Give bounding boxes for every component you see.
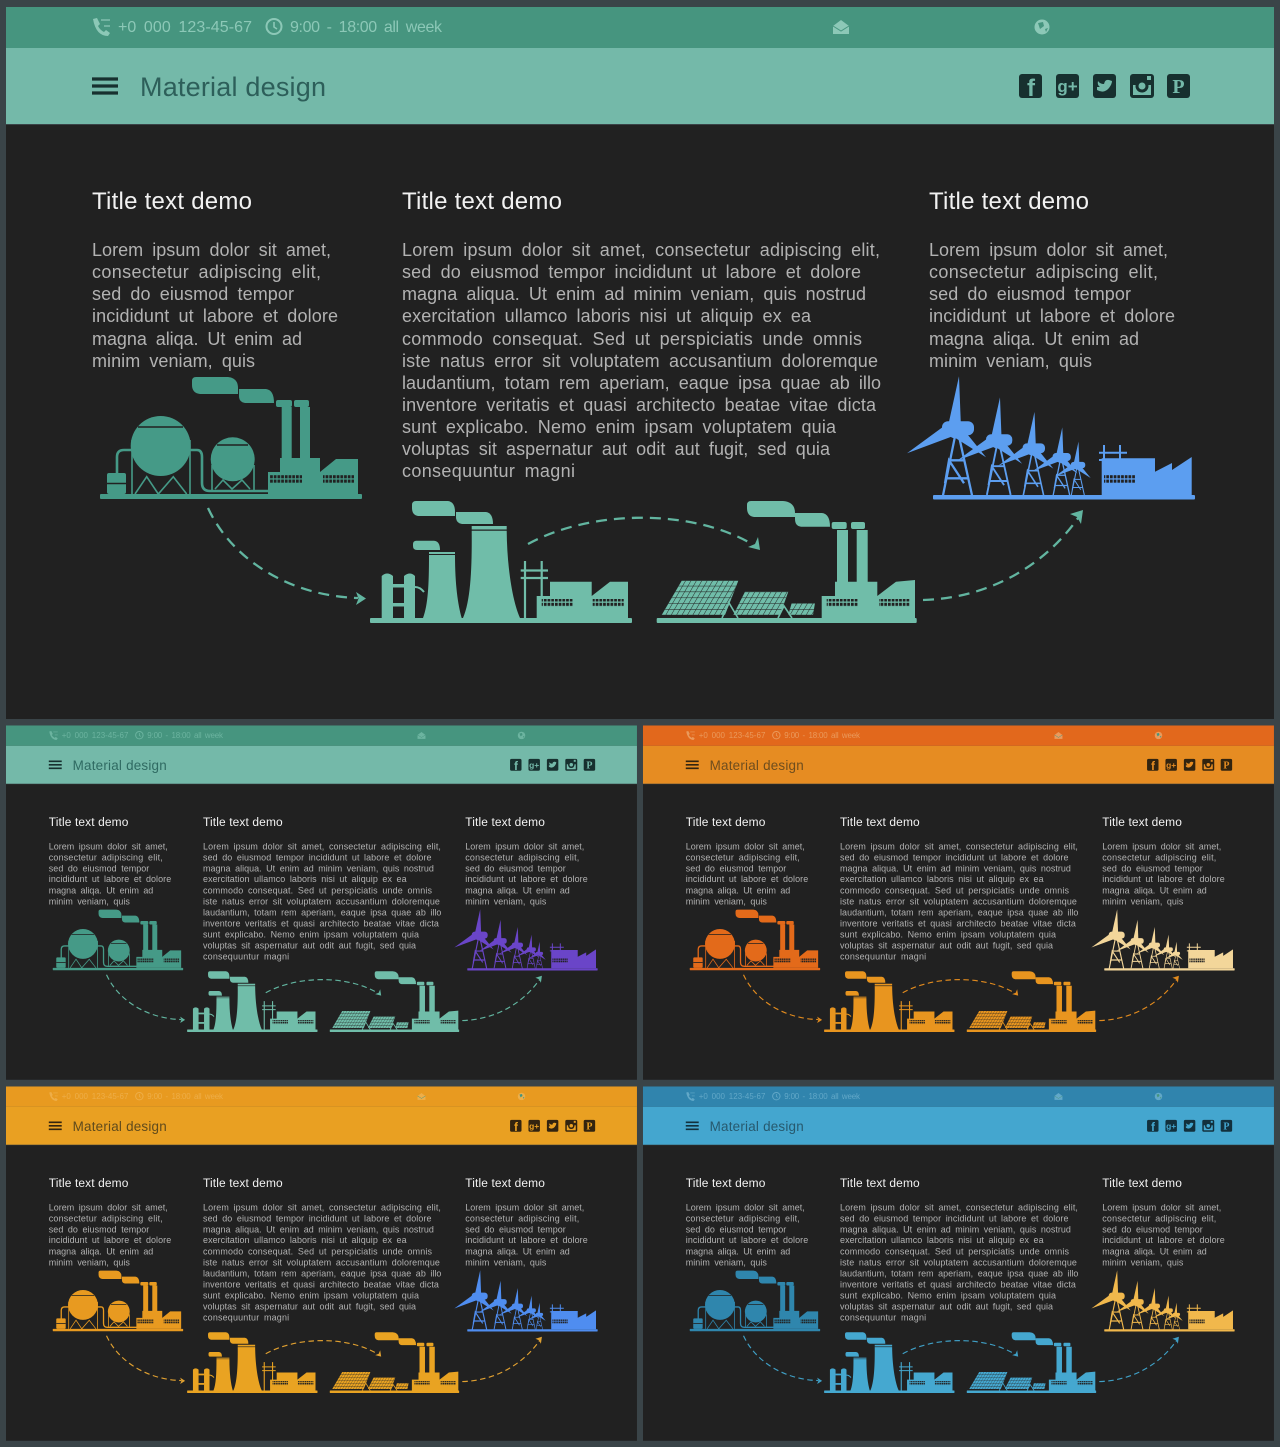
left text block: minim veniam, quis xyxy=(49,1258,130,1268)
right text block xyxy=(1102,1176,1225,1268)
right text block: consectetur adipiscing elit, xyxy=(465,852,579,862)
right text block xyxy=(465,815,588,907)
left text block: Title text demo xyxy=(49,815,129,829)
center text block: sunt explicabo. Nemo enim ipsam voluptatem quia xyxy=(840,929,1056,939)
center text block: consequuntur magni xyxy=(840,1312,926,1322)
left text block: Title text demo xyxy=(49,1176,129,1190)
left text block: sed do eiusmod tempor xyxy=(49,1224,149,1234)
center text block: sed do eiusmod tempor incididunt ut labore et dolore xyxy=(840,852,1068,862)
social icons: g+ xyxy=(1166,1121,1176,1131)
top contact bar: 9:00 - 18:00 all week xyxy=(147,731,223,740)
right text block: Lorem ipsum dolor sit amet, xyxy=(1102,841,1221,851)
social icons: f xyxy=(514,1120,518,1134)
right text block: incididunt ut labore et dolore xyxy=(1102,874,1225,884)
center text block: inventore veritatis et quasi architecto beatae vitae dicta xyxy=(203,1280,439,1290)
center text block: magna aliqua. Ut enim ad minim veniam, quis nostrud xyxy=(840,1224,1071,1234)
panel: amber variant xyxy=(6,1086,637,1441)
right text block: magna aliqa. Ut enim ad xyxy=(465,1247,570,1257)
main panel dark body xyxy=(6,125,1274,719)
center text block: commodo consequat. Sed ut perspiciatis unde omnis xyxy=(203,886,432,896)
center text block: commodo consequat. Sed ut perspiciatis unde omnis xyxy=(402,329,862,349)
social icons: P xyxy=(1223,1121,1229,1132)
top contact bar xyxy=(6,7,1274,48)
illustration: solar plant xyxy=(330,971,459,1032)
social icons: f xyxy=(1151,759,1155,773)
left text block: Title text demo xyxy=(686,815,766,829)
illustration: gas refinery xyxy=(690,910,820,970)
center text block: voluptas sit aspernatur aut odit aut fugit, sed quia xyxy=(203,940,416,950)
illustration: wind farm xyxy=(454,909,598,971)
center text block: commodo consequat. Sed ut perspiciatis unde omnis xyxy=(203,1247,432,1257)
left text block: consectetur adipiscing elit, xyxy=(49,852,163,862)
right text block: Lorem ipsum dolor sit amet, xyxy=(1102,1202,1221,1212)
right text block: magna aliqa. Ut enim ad xyxy=(1102,1247,1207,1257)
right text block: Title text demo xyxy=(1102,815,1182,829)
icon: globe xyxy=(1034,20,1050,34)
panel body xyxy=(643,784,1274,1080)
left text block: consectetur adipiscing elit, xyxy=(49,1213,163,1223)
panel: teal variant xyxy=(6,725,637,1080)
icon: hamburger menu xyxy=(92,79,118,93)
center text block: inventore veritatis et quasi architecto beatae vitae dicta xyxy=(203,919,439,929)
navigation bar xyxy=(643,746,1274,784)
center text block: iste natus error sit voluptatem accusantium doloremque xyxy=(402,351,878,371)
right text block: incididunt ut labore et dolore xyxy=(465,874,588,884)
right text block: minim veniam, quis xyxy=(1102,897,1184,907)
center text block: Title text demo xyxy=(840,815,920,829)
right text block: Title text demo xyxy=(929,188,1089,215)
top contact bar: 9:00 - 18:00 all week xyxy=(147,1092,223,1101)
social icons xyxy=(510,1120,595,1134)
center text block: voluptas sit aspernatur aut odit aut fugit, sed quia xyxy=(402,439,831,459)
center text block: sed do eiusmod tempor incididunt ut labore et dolore xyxy=(203,852,431,862)
social icons: g+ xyxy=(529,1121,539,1131)
illustration: wind farm xyxy=(1091,909,1235,971)
left text block: sed do eiusmod tempor xyxy=(686,863,786,873)
illustration: gas refinery xyxy=(53,1271,183,1331)
center text block: iste natus error sit voluptatem accusantium doloremque xyxy=(203,897,440,907)
right text block: minim veniam, quis xyxy=(465,897,547,907)
center text block xyxy=(840,815,1078,961)
center text block: iste natus error sit voluptatem accusantium doloremque xyxy=(840,1258,1077,1268)
left text block: Lorem ipsum dolor sit amet, xyxy=(686,1202,805,1212)
right text block: minim veniam, quis xyxy=(465,1258,547,1268)
left text block: magna aliqa. Ut enim ad xyxy=(49,1247,153,1257)
top contact bar: +0 000 123-45-67 xyxy=(62,731,129,740)
left text block: Title text demo xyxy=(92,188,252,215)
center text block: sunt explicabo. Nemo enim ipsam voluptatem quia xyxy=(203,929,419,939)
left text block xyxy=(49,1176,171,1268)
right text block: incididunt ut labore et dolore xyxy=(1102,1235,1225,1245)
center text block: laudantium, totam rem aperiam, eaque ipsa quae ab illo xyxy=(402,373,881,393)
center text block: iste natus error sit voluptatem accusantium doloremque xyxy=(203,1258,440,1268)
dashed flow arrows xyxy=(107,975,542,1023)
dashed flow arrows xyxy=(744,1336,1179,1384)
center text block: commodo consequat. Sed ut perspiciatis unde omnis xyxy=(840,886,1069,896)
center text block xyxy=(203,1176,441,1322)
illustration: gas refinery xyxy=(53,910,183,970)
right text block: minim veniam, quis xyxy=(929,351,1092,371)
right text block: sed do eiusmod tempor xyxy=(465,1224,566,1234)
center text block: sed do eiusmod tempor incididunt ut labore et dolore xyxy=(402,262,861,282)
illustration: solar plant xyxy=(657,501,917,623)
right text block: consectetur adipiscing elit, xyxy=(465,1213,579,1223)
left text block: Lorem ipsum dolor sit amet, xyxy=(49,1202,168,1212)
navigation bar xyxy=(6,1107,637,1145)
left text block: sed do eiusmod tempor xyxy=(686,1224,786,1234)
dashed flow arrows xyxy=(744,975,1179,1023)
top contact bar xyxy=(6,1086,637,1107)
left text block: magna aliqa. Ut enim ad xyxy=(686,1247,790,1257)
navigation bar xyxy=(6,48,1274,124)
left text block: incididunt ut labore et dolore xyxy=(686,874,808,884)
top contact bar: 9:00 - 18:00 all week xyxy=(784,1092,860,1101)
left text block: minim veniam, quis xyxy=(686,897,767,907)
center text block: voluptas sit aspernatur aut odit aut fugit, sed quia xyxy=(203,1301,416,1311)
left text block: Lorem ipsum dolor sit amet, xyxy=(49,841,168,851)
right text block: Title text demo xyxy=(465,1176,545,1190)
left text block: consectetur adipiscing elit, xyxy=(686,1213,800,1223)
illustration: cooling tower plant xyxy=(824,1332,954,1393)
center text block xyxy=(402,188,881,481)
illustration: cooling tower plant xyxy=(370,501,632,623)
illustration: wind farm xyxy=(907,376,1195,500)
top contact bar: +0 000 123-45-67 xyxy=(699,731,766,740)
illustration: wind farm xyxy=(454,1270,598,1332)
navigation bar: Material design xyxy=(73,1119,167,1134)
center text block: Title text demo xyxy=(203,1176,283,1190)
illustration: solar plant xyxy=(330,1332,459,1393)
right text block: consectetur adipiscing elit, xyxy=(929,262,1158,282)
right text block: sed do eiusmod tempor xyxy=(929,284,1131,304)
center text block: Lorem ipsum dolor sit amet, consectetur adipiscing elit, xyxy=(840,1202,1078,1212)
social icons: g+ xyxy=(1057,77,1078,96)
illustration: cooling tower plant xyxy=(187,971,317,1032)
center text block xyxy=(203,815,441,961)
center text block xyxy=(840,1176,1078,1322)
illustration: solar plant xyxy=(967,971,1096,1032)
center text block: sunt explicabo. Nemo enim ipsam voluptatem quia xyxy=(203,1290,419,1300)
social icons xyxy=(1147,759,1232,773)
left text block xyxy=(49,815,171,907)
dashed flow arrows xyxy=(107,1336,542,1384)
center text block: laudantium, totam rem aperiam, eaque ipsa quae ab illo xyxy=(840,1269,1078,1279)
top contact bar xyxy=(643,725,1274,746)
center text block: laudantium, totam rem aperiam, eaque ipsa quae ab illo xyxy=(840,908,1078,918)
right text block: magna aliqa. Ut enim ad xyxy=(929,329,1139,349)
left text block: consectetur adipiscing elit, xyxy=(92,262,321,282)
right text block: Lorem ipsum dolor sit amet, xyxy=(465,1202,584,1212)
social icons: P xyxy=(586,760,592,771)
nav title: Material design xyxy=(140,72,326,102)
left text block: incididunt ut labore et dolore xyxy=(686,1235,808,1245)
center text block: magna aliqua. Ut enim ad minim veniam, quis nostrud xyxy=(203,863,434,873)
center text block: Lorem ipsum dolor sit amet, consectetur adipiscing elit, xyxy=(402,240,880,260)
center text block: exercitation ullamco laboris nisi ut aliquip ex ea xyxy=(203,1235,407,1245)
social icons: P xyxy=(586,1121,592,1132)
left text block xyxy=(686,815,808,907)
left text block: incididunt ut labore et dolore xyxy=(49,874,171,884)
left text block: sed do eiusmod tempor xyxy=(92,284,294,304)
left text block: minim veniam, quis xyxy=(49,897,130,907)
center text block: consequuntur magni xyxy=(203,951,289,961)
top contact bar xyxy=(643,1086,1274,1107)
center text block: Lorem ipsum dolor sit amet, consectetur adipiscing elit, xyxy=(203,841,441,851)
center text block: inventore veritatis et quasi architecto beatae vitae dicta xyxy=(840,919,1076,929)
left text block: incididunt ut labore et dolore xyxy=(49,1235,171,1245)
social icons: P xyxy=(1223,760,1229,771)
center text block: magna aliqua. Ut enim ad minim veniam, quis nostrud xyxy=(840,863,1071,873)
illustration: gas refinery xyxy=(100,377,362,499)
center text block: exercitation ullamco laboris nisi ut aliquip ex ea xyxy=(402,306,812,326)
social icons: f xyxy=(1027,75,1036,102)
left text block xyxy=(686,1176,808,1268)
right text block: consectetur adipiscing elit, xyxy=(1102,852,1216,862)
top contact bar: +0 000 123-45-67 xyxy=(118,19,252,36)
social icons xyxy=(1147,1120,1232,1134)
right text block: magna aliqa. Ut enim ad xyxy=(1102,886,1207,896)
top contact bar: +0 000 123-45-67 xyxy=(62,1092,129,1101)
social icons xyxy=(1019,74,1190,102)
top contact bar: +0 000 123-45-67 xyxy=(699,1092,766,1101)
center text block: Title text demo xyxy=(402,188,562,215)
navigation bar xyxy=(6,746,637,784)
panel: blue variant xyxy=(643,1086,1274,1441)
center text block: sed do eiusmod tempor incididunt ut labore et dolore xyxy=(203,1213,431,1223)
left text block: magna aliqa. Ut enim ad xyxy=(686,886,790,896)
right text block: Title text demo xyxy=(465,815,545,829)
center text block: sunt explicabo. Nemo enim ipsam voluptatem quia xyxy=(840,1290,1056,1300)
illustration: gas refinery xyxy=(690,1271,820,1331)
social icons: f xyxy=(1151,1120,1155,1134)
social icons: f xyxy=(514,759,518,773)
center text block: Title text demo xyxy=(203,815,283,829)
illustration: wind farm xyxy=(1091,1270,1235,1332)
right text block: consectetur adipiscing elit, xyxy=(1102,1213,1216,1223)
social icons: g+ xyxy=(1166,760,1176,770)
center text block: Lorem ipsum dolor sit amet, consectetur adipiscing elit, xyxy=(203,1202,441,1212)
right text block: Lorem ipsum dolor sit amet, xyxy=(929,240,1168,260)
top contact bar: 9:00 - 18:00 all week xyxy=(784,731,860,740)
panel: orange variant xyxy=(643,725,1274,1080)
icon: phone xyxy=(93,18,110,36)
icon: clock xyxy=(266,19,282,34)
panel body xyxy=(643,1145,1274,1441)
right text block: Title text demo xyxy=(1102,1176,1182,1190)
center text block: Title text demo xyxy=(840,1176,920,1190)
social icons: P xyxy=(1172,76,1185,98)
right text block xyxy=(1102,815,1225,907)
left text block: Lorem ipsum dolor sit amet, xyxy=(686,841,805,851)
center text block: sed do eiusmod tempor incididunt ut labore et dolore xyxy=(840,1213,1068,1223)
center text block: inventore veritatis et quasi architecto beatae vitae dicta xyxy=(402,395,877,415)
panel body xyxy=(6,784,637,1080)
center text block: inventore veritatis et quasi architecto beatae vitae dicta xyxy=(840,1280,1076,1290)
left text block: magna aliqa. Ut enim ad xyxy=(49,886,153,896)
social icons: g+ xyxy=(529,760,539,770)
right text block: sed do eiusmod tempor xyxy=(1102,1224,1203,1234)
left text block: incididunt ut labore et dolore xyxy=(92,306,338,326)
icon: mail xyxy=(833,20,849,34)
center text block: consequuntur magni xyxy=(402,461,575,481)
navigation bar: Material design xyxy=(73,758,167,773)
center text block: consequuntur magni xyxy=(203,1312,289,1322)
left text block: Title text demo xyxy=(686,1176,766,1190)
left text block: sed do eiusmod tempor xyxy=(49,863,149,873)
navigation bar: Material design xyxy=(710,1119,804,1134)
center text block: consequuntur magni xyxy=(840,951,926,961)
center text block: voluptas sit aspernatur aut odit aut fugit, sed quia xyxy=(840,940,1053,950)
left text block xyxy=(92,188,338,371)
top contact bar xyxy=(6,725,637,746)
center text block: laudantium, totam rem aperiam, eaque ipsa quae ab illo xyxy=(203,1269,441,1279)
center text block: commodo consequat. Sed ut perspiciatis unde omnis xyxy=(840,1247,1069,1257)
panel body xyxy=(6,1145,637,1441)
right text block: minim veniam, quis xyxy=(1102,1258,1184,1268)
center text block: laudantium, totam rem aperiam, eaque ipsa quae ab illo xyxy=(203,908,441,918)
right text block xyxy=(465,1176,588,1268)
navigation bar: Material design xyxy=(710,758,804,773)
navigation bar xyxy=(643,1107,1274,1145)
right text block: incididunt ut labore et dolore xyxy=(465,1235,588,1245)
center text block: iste natus error sit voluptatem accusantium doloremque xyxy=(840,897,1077,907)
illustration: cooling tower plant xyxy=(824,971,954,1032)
right text block xyxy=(929,188,1175,371)
center text block: sunt explicabo. Nemo enim ipsam voluptatem quia xyxy=(402,417,837,437)
left text block: magna aliqa. Ut enim ad xyxy=(92,329,302,349)
left text block: minim veniam, quis xyxy=(92,351,255,371)
center text block: magna aliqua. Ut enim ad minim veniam, quis nostrud xyxy=(203,1224,434,1234)
top contact bar: 9:00 - 18:00 all week xyxy=(290,19,443,36)
right text block: magna aliqa. Ut enim ad xyxy=(465,886,570,896)
dashed flow arrows xyxy=(208,508,1083,605)
center text block: exercitation ullamco laboris nisi ut aliquip ex ea xyxy=(840,1235,1044,1245)
left text block: minim veniam, quis xyxy=(686,1258,767,1268)
center text block: magna aliqua. Ut enim ad minim veniam, quis nostrud xyxy=(402,284,866,304)
right text block: Lorem ipsum dolor sit amet, xyxy=(465,841,584,851)
illustration: solar plant xyxy=(967,1332,1096,1393)
center text block: voluptas sit aspernatur aut odit aut fugit, sed quia xyxy=(840,1301,1053,1311)
center text block: exercitation ullamco laboris nisi ut aliquip ex ea xyxy=(203,874,407,884)
left text block: consectetur adipiscing elit, xyxy=(686,852,800,862)
right text block: incididunt ut labore et dolore xyxy=(929,306,1175,326)
center text block: Lorem ipsum dolor sit amet, consectetur adipiscing elit, xyxy=(840,841,1078,851)
left text block: Lorem ipsum dolor sit amet, xyxy=(92,240,331,260)
center text block: exercitation ullamco laboris nisi ut aliquip ex ea xyxy=(840,874,1044,884)
panel: main design preview xyxy=(6,7,1274,719)
right text block: sed do eiusmod tempor xyxy=(1102,863,1203,873)
social icons xyxy=(510,759,595,773)
right text block: sed do eiusmod tempor xyxy=(465,863,566,873)
illustration: cooling tower plant xyxy=(187,1332,317,1393)
